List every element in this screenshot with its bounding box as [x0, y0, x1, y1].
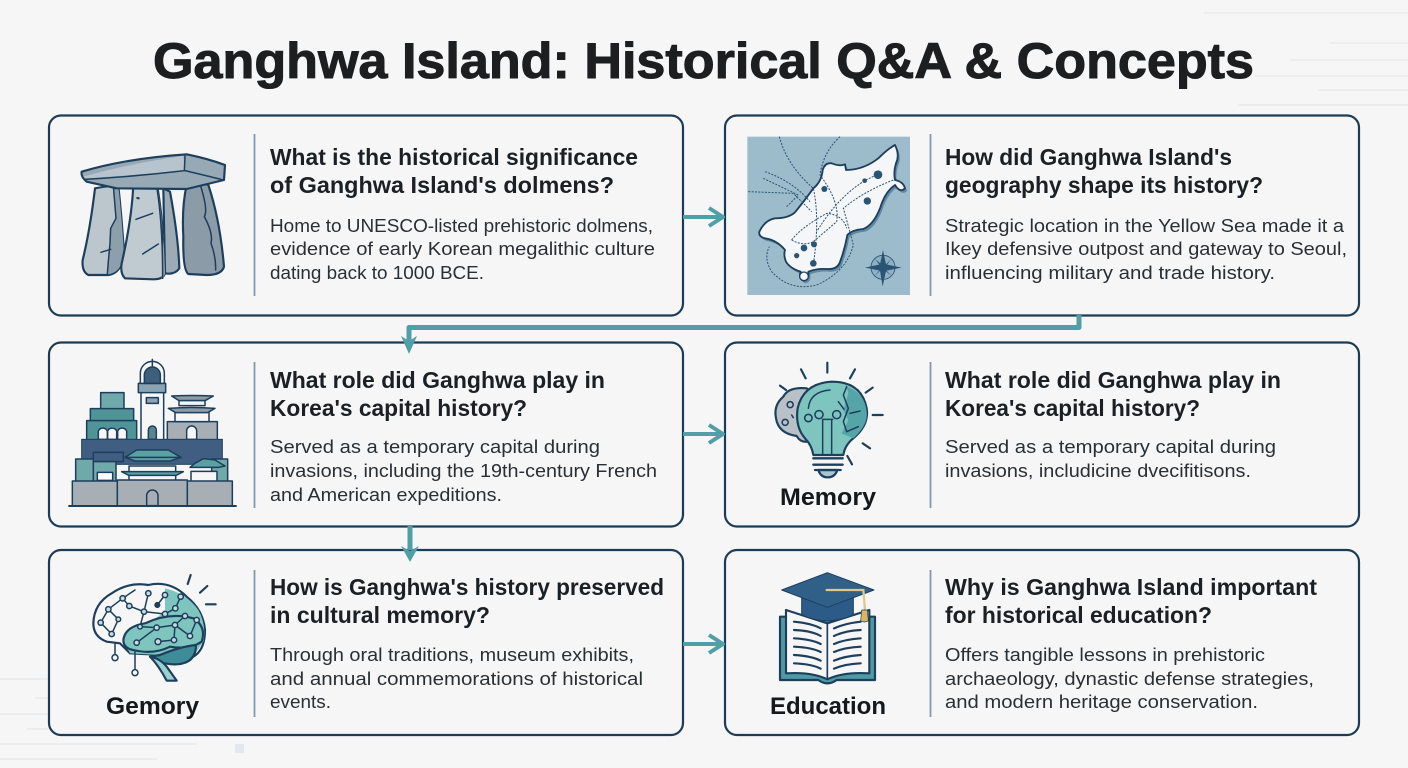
answer: Served as a temporary capital during [945, 436, 1276, 457]
question [270, 574, 664, 628]
question [270, 144, 638, 198]
question: of Ganghwa Island's dolmens? [270, 172, 614, 198]
compass [865, 250, 902, 287]
divider [930, 134, 932, 296]
arrow: dolmens to geography [683, 208, 723, 226]
divider [254, 570, 256, 717]
question [270, 367, 605, 421]
question: geography shape its history? [945, 172, 1263, 198]
answer: and annual commemorations of historical [270, 668, 643, 689]
answer: evidence of early Korean megalithic culture [270, 238, 655, 259]
icon: network brain [93, 575, 216, 681]
answer [945, 215, 1347, 283]
answer [270, 215, 655, 283]
divider [254, 362, 256, 508]
question: How is Ganghwa's history preserved [270, 574, 664, 600]
arrow: capital to cultural memory [401, 526, 419, 562]
panel: cultural memory [49, 550, 683, 735]
answer: Home to UNESCO-listed prehistoric dolmens, [270, 215, 653, 236]
answer [945, 436, 1276, 481]
question: What role did Ganghwa play in [945, 367, 1281, 393]
panel: capital history [49, 342, 683, 526]
divider [930, 570, 932, 717]
question: Korea's capital history? [270, 395, 527, 421]
answer: influencing military and trade history. [945, 262, 1275, 283]
icon: fortified city [68, 359, 237, 506]
label: Education [770, 693, 886, 720]
answer: Served as a temporary capital during [270, 436, 600, 457]
arrow: cultural memory to education [683, 635, 723, 653]
divider [254, 134, 256, 296]
answer: invasions, includicine dvecifitisons. [945, 460, 1251, 481]
question [945, 574, 1317, 628]
question: What is the historical significance [270, 144, 638, 170]
arrow: capital to memory [683, 425, 723, 443]
answer: Offers tangible lessons in prehistoric [945, 644, 1265, 665]
answer: and modern heritage conservation. [945, 691, 1258, 712]
panel: education [725, 550, 1359, 735]
answer: invasions, including the 19th-century French [270, 460, 657, 481]
panel: geography [725, 116, 1359, 316]
arrow: geography to capital history [401, 315, 1079, 354]
question: Why is Ganghwa Island important [945, 574, 1317, 600]
question: in cultural memory? [270, 602, 490, 628]
answer: events. [270, 691, 331, 712]
question [945, 144, 1263, 198]
question: for historical education? [945, 602, 1212, 628]
answer: Ikey defensive outpost and gateway to Seoul, [945, 238, 1347, 259]
label: Memory [780, 484, 877, 511]
answer [270, 436, 657, 505]
icon: brain lightbulb [775, 363, 883, 477]
question: How did Ganghwa Island's [945, 144, 1232, 170]
question [945, 367, 1281, 421]
answer: Through oral traditions, museum exhibits, [270, 644, 634, 665]
divider [930, 362, 932, 508]
icon: dolmen [82, 154, 225, 279]
answer [270, 644, 643, 712]
label: Gemory [106, 693, 200, 720]
question: Korea's capital history? [945, 395, 1200, 421]
title: Ganghwa Island: Historical Q&A & Concepts [153, 33, 1254, 89]
answer: archaeology, dynastic defense strategies, [945, 668, 1314, 689]
answer: Strategic location in the Yellow Sea made it a [945, 215, 1345, 236]
answer: and American expeditions. [270, 484, 502, 505]
panel: dolmens [49, 116, 683, 316]
icon: book and graduation cap [780, 573, 875, 683]
answer [945, 644, 1314, 712]
question: What role did Ganghwa play in [270, 367, 605, 393]
icon: island map [747, 137, 910, 295]
answer: dating back to 1000 BCE. [270, 262, 484, 283]
panel: memory [725, 342, 1359, 526]
